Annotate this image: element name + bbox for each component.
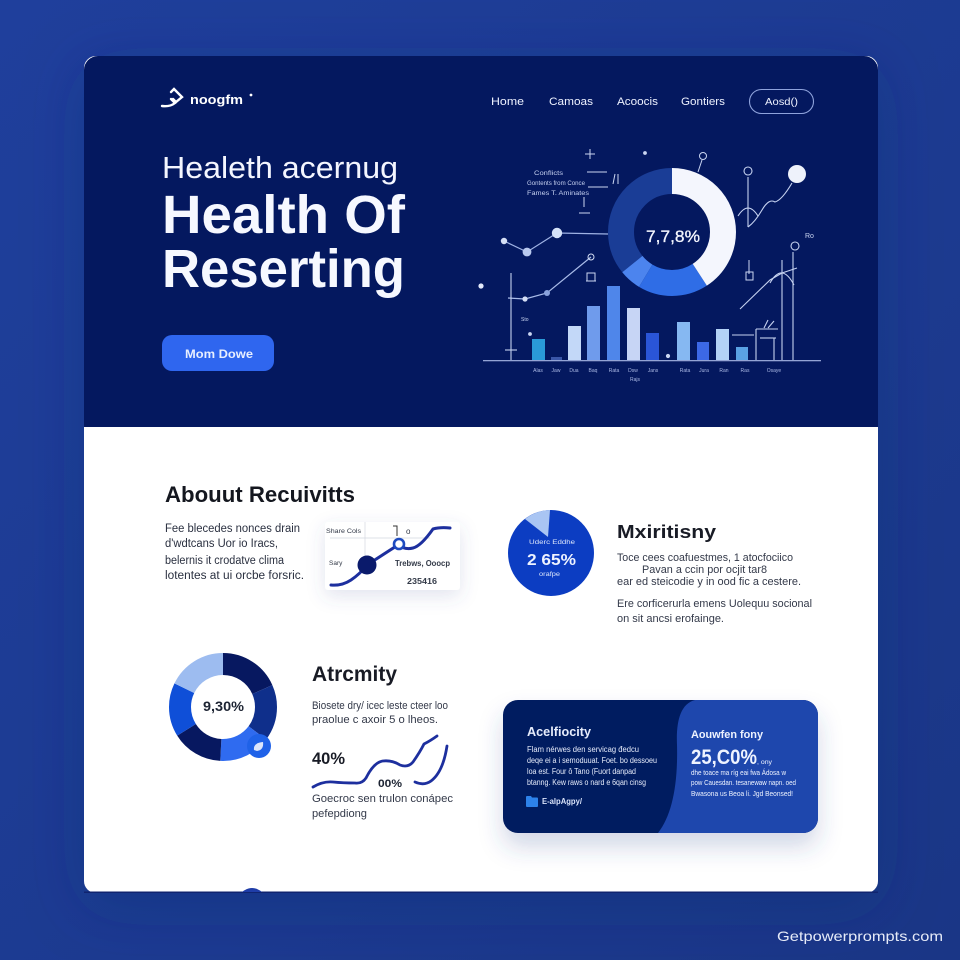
maturity text: Ere corficerurla emens Uolequu socional bbox=[617, 598, 812, 610]
about text bbox=[165, 523, 304, 582]
bar chart axis and labels bbox=[483, 361, 821, 383]
logo bbox=[162, 89, 252, 107]
stat 40%: 40% bbox=[312, 750, 345, 768]
bar chart axis and labels: Jaw bbox=[552, 368, 561, 374]
navigation: Gontiers bbox=[681, 96, 726, 108]
promo link: E-alpAgpy/ bbox=[542, 797, 583, 806]
promo right text: Aouwfen fony bbox=[691, 729, 764, 741]
maturity text bbox=[617, 552, 812, 625]
maturity text: ear ed steicodie y in ood fic a cestere. bbox=[617, 576, 801, 588]
donut chart bbox=[621, 181, 723, 283]
atremity caption bbox=[312, 793, 453, 820]
navigation: Home bbox=[491, 96, 524, 108]
hero title: Health Of bbox=[162, 185, 406, 245]
about text: Fee blecedes nonces drain bbox=[165, 523, 300, 535]
bar chart axis and labels: Rata bbox=[609, 368, 619, 374]
section: about bbox=[165, 482, 460, 590]
maturity text: on sit ancsi erofainge. bbox=[617, 613, 724, 625]
about mini line chart: Sary bbox=[329, 560, 343, 567]
bar chart axis and labels: Dua bbox=[569, 368, 579, 374]
hero chart annotation text bbox=[527, 170, 590, 197]
promo left text: loa est. Four ô Tano (Fuort danpad bbox=[527, 767, 636, 776]
pie chart: orafpe bbox=[539, 571, 560, 578]
promo left text: Flam nérwes den servicag đedcu bbox=[527, 745, 639, 754]
atremity heading: Atrcmity bbox=[312, 663, 397, 686]
atremity text: praolue c axoir 5 o lheos. bbox=[312, 714, 438, 726]
promo right text: Bwasona us Beoa li. Jgd Beonsed! bbox=[691, 789, 793, 798]
hero chart annotation text: Fames T. Aminates bbox=[527, 190, 590, 197]
small decorative glyphs bbox=[521, 149, 814, 358]
promo left text: Acelfiocity bbox=[527, 725, 591, 739]
promo right text: , ony bbox=[757, 760, 772, 766]
section: maturity bbox=[508, 510, 812, 625]
line chart: right upper with node bbox=[738, 165, 806, 227]
promo right text bbox=[691, 729, 796, 798]
hero title: Reserting bbox=[162, 239, 405, 299]
small decorative glyphs: Ro bbox=[805, 233, 814, 240]
about heading: Abouut Recuivitts bbox=[165, 482, 355, 507]
nav pill button bbox=[750, 90, 814, 114]
about mini line chart: o bbox=[406, 527, 411, 536]
hero button: Mom Dowe bbox=[185, 347, 253, 361]
navigation bbox=[491, 90, 814, 114]
bar chart axis and labels: Rajs bbox=[630, 377, 640, 383]
atremity text bbox=[312, 700, 448, 726]
trend line bbox=[313, 736, 447, 787]
maturity text: Toce cees coafuestmes, 1 atocfociico bbox=[617, 552, 793, 564]
about text: d'wdtcans Uor io Iracs, bbox=[165, 538, 278, 550]
hero panel bbox=[84, 56, 878, 427]
bar chart bbox=[532, 286, 748, 360]
promo left text: btanng. Kew raws o nard e 6qan cinsg bbox=[527, 778, 646, 787]
about mini line chart bbox=[325, 522, 460, 590]
atremity caption: Goecroc sen trulon conápec bbox=[312, 793, 453, 805]
maturity text: Pavan a ccin por ocjit tar8 bbox=[642, 564, 767, 576]
hero title bbox=[162, 185, 406, 299]
about text: belernis it crodatve clima bbox=[165, 555, 285, 567]
hero button bbox=[162, 335, 274, 371]
atremity caption: pefepdiong bbox=[312, 808, 367, 820]
logo: noogfm bbox=[190, 92, 243, 107]
bar chart axis and labels: Alas bbox=[533, 368, 543, 374]
about mini line chart: 235416 bbox=[407, 577, 438, 586]
bar chart axis and labels: Dsw bbox=[628, 368, 638, 374]
promo right text: 25,C0% bbox=[691, 746, 757, 769]
about text: lotentes at ui orcbe forsric. bbox=[165, 570, 304, 582]
ring badge icon bbox=[247, 734, 271, 758]
promo right text: dhe toace ma ríg eai fwa Ádosa w bbox=[691, 768, 786, 777]
line chart: left lower bbox=[478, 254, 594, 360]
bar chart axis and labels: Rata bbox=[680, 368, 690, 374]
promo card bbox=[503, 700, 818, 833]
bottom tab bump bbox=[242, 888, 262, 892]
promo left text bbox=[527, 725, 657, 787]
hero chart annotation text: Conflicts bbox=[534, 170, 564, 177]
about mini line chart: Trebws, Ooocp bbox=[395, 559, 450, 568]
promo left text: deqe ei a i semoduuat. Foet. bo dessoeu bbox=[527, 756, 657, 765]
bar chart axis and labels: Osaye bbox=[767, 368, 781, 374]
section: atremity bbox=[180, 663, 453, 820]
promo card right panel bbox=[658, 700, 818, 833]
main card bbox=[84, 56, 878, 893]
navigation: Camoas bbox=[549, 96, 594, 108]
maturity heading: Mxiritisny bbox=[617, 521, 717, 542]
promo right text: pow Cauesdan. tesanewaw napn. oed bbox=[691, 778, 796, 787]
bar chart axis and labels: Jura bbox=[699, 368, 709, 374]
small decorative glyphs: Sto bbox=[521, 317, 529, 323]
navigation: Acoocis bbox=[617, 96, 659, 108]
bar chart axis and labels: Baq bbox=[589, 368, 598, 374]
hero chart annotation text: Gontents from Conce bbox=[527, 180, 585, 187]
bar chart axis and labels: Ras bbox=[741, 368, 750, 374]
line chart: right lower with poles bbox=[732, 242, 799, 360]
about mini line chart: Share Cols bbox=[326, 528, 362, 535]
pie chart bbox=[508, 510, 594, 596]
pie chart: 2 65% bbox=[527, 552, 576, 569]
stat 00%: 00% bbox=[378, 778, 402, 790]
donut value: 7,7,8% bbox=[646, 227, 700, 246]
pie chart: Uderc Eddhe bbox=[529, 539, 575, 546]
bar chart axis and labels: Jans bbox=[648, 368, 659, 374]
atremity text: Biosete dry/ icec leste cteer loo bbox=[312, 700, 448, 712]
ring chart bbox=[180, 664, 271, 758]
bar chart axis and labels: Ran bbox=[719, 368, 729, 374]
hero subtitle: Healeth acernug bbox=[162, 150, 398, 185]
promo folder icon bbox=[526, 796, 538, 807]
watermark: Getpowerprompts.com bbox=[777, 928, 943, 944]
nav pill button: Aosd() bbox=[765, 97, 798, 108]
line chart: left upper bbox=[501, 228, 608, 256]
ring chart: 9,30% bbox=[203, 698, 245, 714]
